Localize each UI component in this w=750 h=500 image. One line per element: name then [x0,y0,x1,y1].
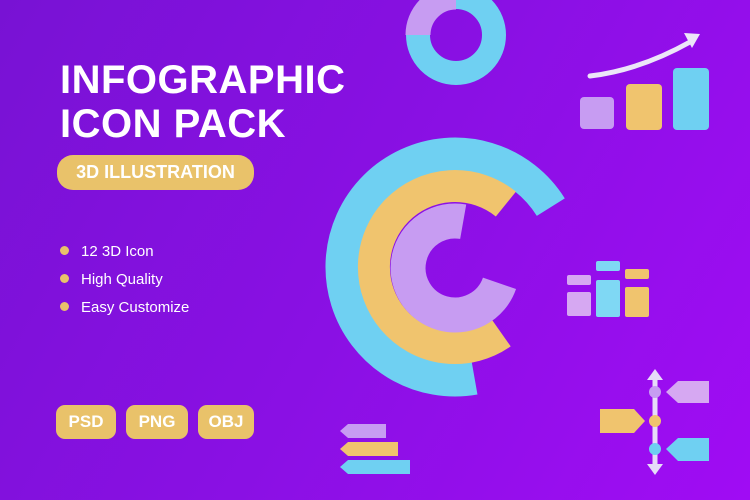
subtitle pill [57,155,254,190]
PSD: PSD [69,412,103,431]
icon: horizontal arrow bars [340,424,410,474]
PNG [126,405,188,439]
item 3: Easy Customize [81,299,189,316]
icon: timeline [600,369,709,475]
icon: growth bar chart [580,33,709,130]
item 1: 12 3D Icon [81,243,154,260]
PNG: PNG [139,412,175,431]
icon: donut [418,0,494,73]
icon: concentric arcs [342,154,551,380]
title [60,58,346,146]
subtitle pill: 3D ILLUSTRATION [76,162,235,182]
format badges [56,405,254,439]
icon: labeled bars [567,261,649,317]
item 2: High Quality [81,271,163,288]
title: INFOGRAPHIC [60,58,346,102]
OBJ: OBJ [209,412,243,431]
title: ICON PACK [60,102,286,146]
feature list [60,243,189,316]
PSD [56,405,116,439]
OBJ [198,405,254,439]
